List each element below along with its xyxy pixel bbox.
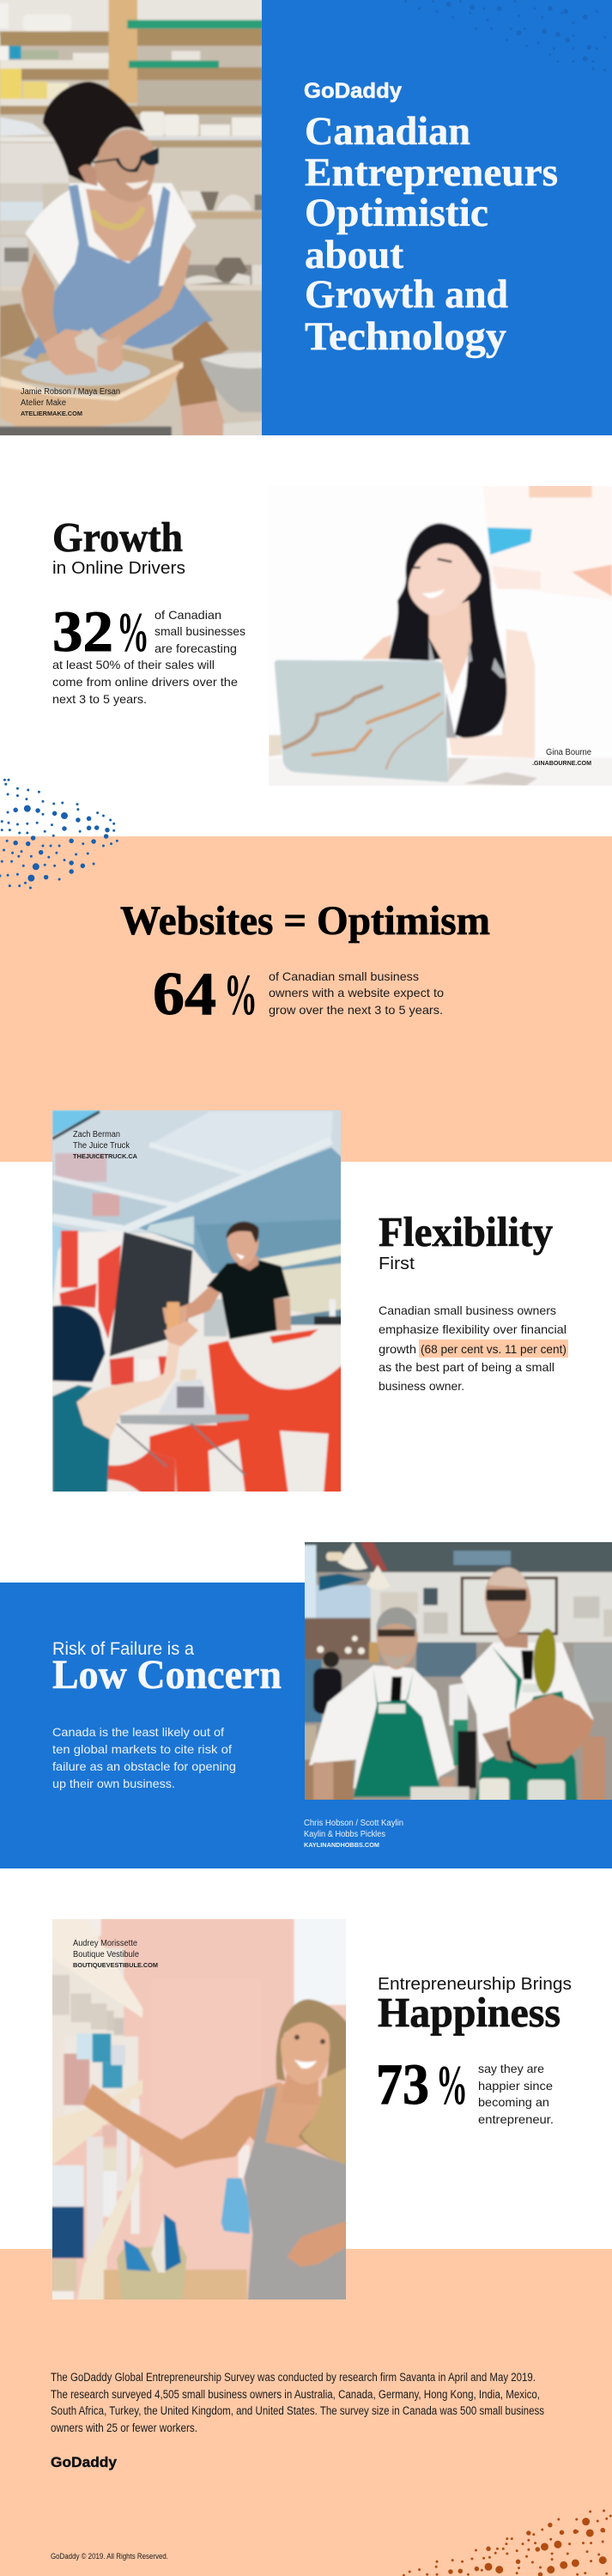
stat description: owners with a website expect to bbox=[269, 986, 444, 999]
heading: Growth: Growth bbox=[52, 513, 183, 561]
survey note: South Africa, Turkey, the United Kingdom, and United States. The survey size in Canada was 500 small business bbox=[51, 2404, 544, 2417]
body text with highlight: growth bbox=[379, 1342, 416, 1356]
stat 64%: 64 bbox=[153, 961, 216, 1028]
photo: pickle shop owners bbox=[305, 1542, 612, 1800]
stat 64% bbox=[153, 961, 258, 1028]
footer bbox=[51, 2371, 610, 2575]
caption: Zach Berman: THEJUICETRUCK.CA bbox=[73, 1154, 137, 1160]
caption: Audrey Morissette: Audrey Morissette bbox=[73, 1939, 137, 1948]
survey note bbox=[51, 2371, 544, 2434]
body text: ten global markets to cite risk of bbox=[52, 1742, 232, 1756]
subheading: First: First bbox=[379, 1255, 415, 1273]
photo: boutique owner bbox=[52, 1919, 346, 2300]
photo: woman at marble laptop bbox=[269, 486, 612, 786]
stat 73%: 73 bbox=[376, 2051, 429, 2117]
stat 32%: % bbox=[117, 601, 149, 664]
photo: potter at the wheel bbox=[0, 0, 275, 449]
stat description: say they are bbox=[478, 2062, 544, 2075]
survey note: The research surveyed 4,505 small business owners in Australia, Canada, Germany, Hong Kong, India, Mexico, bbox=[51, 2388, 540, 2401]
bottom peach background bbox=[0, 2249, 612, 2576]
blue panel: low concern bbox=[0, 1531, 612, 1868]
stat description bbox=[52, 608, 245, 706]
caption: Audrey Morissette: Boutique Vestibule bbox=[73, 1950, 139, 1959]
copyright: GoDaddy © 2019. All Rights Reserved. bbox=[51, 2552, 168, 2561]
main title: Optimistic bbox=[305, 191, 488, 235]
stat description: happier since bbox=[478, 2079, 553, 2093]
hero blue background bbox=[262, 0, 612, 435]
highlight bbox=[419, 1340, 568, 1358]
heading: Low Concern: Low Concern bbox=[52, 1652, 282, 1698]
caption: Gina Bourne: .GINABOURNE.COM bbox=[532, 761, 591, 767]
body text with highlight: Canadian small business owners bbox=[379, 1303, 556, 1317]
main title: Technology bbox=[305, 314, 507, 359]
caption: Chris Hobson: KAYLINANDHOBBS.COM bbox=[304, 1843, 379, 1849]
photo: juice truck bbox=[52, 1110, 341, 1492]
body text bbox=[52, 1725, 236, 1790]
body text with highlight: (68 per cent vs. 11 per cent) bbox=[421, 1342, 567, 1356]
heading: Flexibility: Flexibility bbox=[379, 1208, 553, 1255]
stat description: at least 50% of their sales will bbox=[52, 658, 215, 671]
stat description: small businesses bbox=[155, 624, 245, 638]
caption: Gina Bourne bbox=[532, 749, 591, 765]
caption: Zach Berman: Zach Berman bbox=[73, 1130, 120, 1139]
body text: failure as an obstacle for opening bbox=[52, 1759, 236, 1773]
stat description: entrepreneur. bbox=[478, 2112, 554, 2126]
caption: Jamie Robson: Atelier Make bbox=[21, 398, 66, 408]
stat 32% bbox=[52, 598, 149, 664]
heading: Websites = Optimism: Websites = Optimism bbox=[120, 898, 490, 944]
caption: Chris Hobson: Chris Hobson / Scott Kaylin bbox=[304, 1819, 403, 1828]
section: growth in online drivers bbox=[52, 475, 612, 798]
GoDaddy logo white: GoDaddy bbox=[304, 79, 402, 103]
section: happiness bbox=[0, 1908, 612, 2576]
stat 64%: % bbox=[224, 962, 258, 1027]
stat description: come from online drivers over the bbox=[52, 675, 238, 689]
stat description bbox=[269, 969, 444, 1017]
subheading: Entrepreneurship Brings: Entrepreneurship Brings bbox=[378, 1975, 572, 1994]
caption: Jamie Robson: Jamie Robson / Maya Ersan bbox=[21, 387, 120, 397]
caption: Audrey Morissette: BOUTIQUEVESTIBULE.COM bbox=[73, 1963, 158, 1969]
body text with highlight: as the best part of being a small bbox=[379, 1360, 554, 1374]
caption: Gina Bourne: Gina Bourne bbox=[546, 748, 591, 757]
subheading: Risk of Failure: Risk of Failure is a bbox=[52, 1639, 194, 1659]
survey note: The GoDaddy Global Entrepreneurship Survey was conducted by research firm Savanta in April and May 2019. bbox=[51, 2371, 536, 2384]
caption: Chris Hobson: Kaylin & Hobbs Pickles bbox=[304, 1830, 385, 1839]
body text with highlight: emphasize flexibility over financial bbox=[379, 1322, 567, 1336]
stat 73%: % bbox=[436, 2054, 468, 2117]
decorative dots on hero bbox=[406, 2, 604, 70]
subheading: in Online Drivers bbox=[52, 559, 185, 578]
peach background bbox=[0, 836, 612, 1162]
caption: Zach Berman: The Juice Truck bbox=[73, 1141, 130, 1151]
main title: about bbox=[305, 233, 403, 277]
heading: Happiness: Happiness bbox=[378, 1989, 560, 2036]
stat 73% bbox=[376, 2051, 468, 2117]
stat description: grow over the next 3 to 5 years. bbox=[269, 1003, 443, 1017]
stat description: are forecasting bbox=[155, 641, 237, 655]
GoDaddy logo dark: GoDaddy bbox=[51, 2454, 118, 2470]
section: flexibility first bbox=[41, 1099, 568, 1505]
main title: Growth and bbox=[305, 272, 508, 317]
stat description bbox=[478, 2062, 554, 2126]
caption: Jamie Robson bbox=[21, 387, 120, 417]
stat description: of Canadian bbox=[155, 608, 221, 622]
body text with highlight bbox=[379, 1303, 568, 1393]
blue background bbox=[0, 1583, 612, 1868]
decorative brown dots bbox=[403, 2511, 610, 2575]
body text with highlight: business owner. bbox=[379, 1379, 464, 1393]
stat description: next 3 to 5 years. bbox=[52, 692, 147, 706]
body text: Canada is the least likely out of bbox=[52, 1725, 224, 1739]
caption: Zach Berman bbox=[73, 1130, 137, 1160]
stat description: becoming an bbox=[478, 2095, 549, 2109]
survey note: owners with 25 or fewer workers. bbox=[51, 2421, 197, 2434]
main title: Entrepreneurs bbox=[305, 150, 558, 195]
main title bbox=[305, 109, 558, 359]
caption: Jamie Robson: ATELIERMAKE.COM bbox=[21, 411, 82, 417]
body text: up their own business. bbox=[52, 1777, 175, 1790]
stat description: of Canadian small business bbox=[269, 969, 419, 983]
caption: Audrey Morissette bbox=[73, 1939, 158, 1969]
decorative blue dots bbox=[0, 780, 117, 888]
peach panel: websites optimism bbox=[0, 780, 612, 1162]
main title: Canadian bbox=[305, 109, 470, 154]
stat 32%: 32 bbox=[52, 598, 113, 664]
caption: Chris Hobson bbox=[304, 1819, 403, 1849]
hero panel bbox=[0, 0, 612, 449]
